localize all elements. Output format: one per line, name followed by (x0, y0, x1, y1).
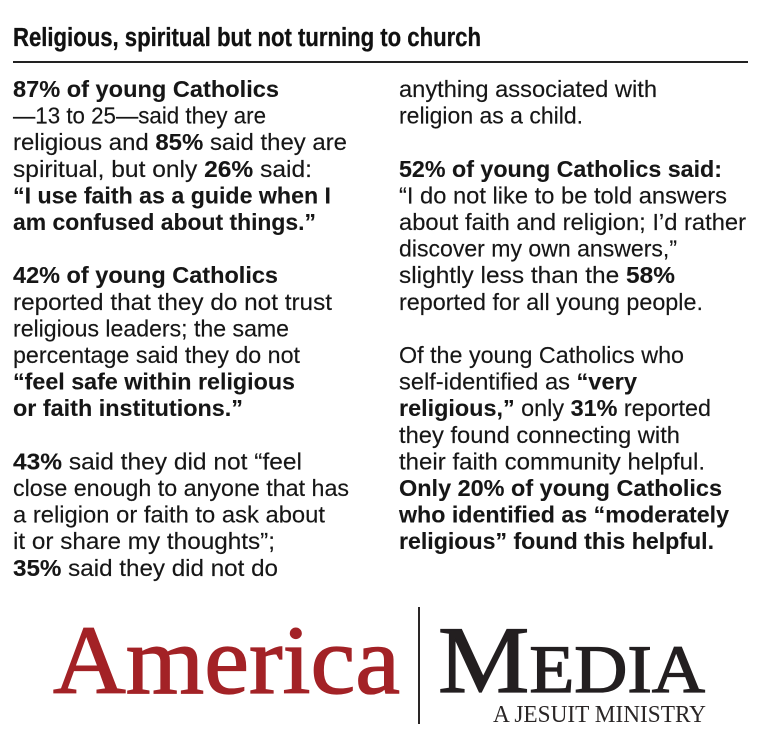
paragraph: 87% of young Catholics: religious and 85% said they are (13, 129, 347, 155)
paragraph: 43% and 35%: 35% said they did not do (13, 555, 278, 581)
logo tagline: A JESUIT MINISTRY (493, 702, 706, 728)
paragraph: 87% of young Catholics: “I use faith as a guide when I (13, 182, 331, 208)
paragraph: continued from left column: religion as a child. (399, 103, 583, 129)
paragraph: very and moderately religious: they found connecting with (399, 422, 680, 448)
paragraph: very and moderately religious: self-identified as “very (399, 369, 637, 395)
paragraph: 43% and 35%: 43% said they did not “feel (13, 448, 302, 474)
paragraph: very and moderately religious: Of the young Catholics who (399, 342, 684, 368)
right text column (398, 76, 746, 554)
paragraph: 43% and 35% (13, 448, 349, 581)
paragraph: 52% of young Catholics said: discover my own answers,” (399, 236, 677, 262)
paragraph: very and moderately religious: religious” found this helpful. (399, 528, 714, 554)
paragraph: 52% of young Catholics said (399, 156, 746, 315)
paragraph: 43% and 35%: close enough to anyone that has (13, 475, 349, 501)
logo: America Media (53, 607, 706, 728)
paragraph: 42% of young Catholics: “feel safe within religious (13, 369, 295, 395)
paragraph: 52% of young Catholics said: 52% of young Catholics said: (399, 156, 722, 182)
logo divider (418, 607, 420, 724)
title: Religious, spiritual but not turning to church (13, 24, 481, 52)
paragraph: 87% of young Catholics: am confused about things.” (13, 209, 316, 235)
logo wordmark: America: America (53, 607, 400, 714)
paragraph: 52% of young Catholics said: reported for all young people. (399, 289, 703, 315)
paragraph: 42% of young Catholics: 42% of young Catholics (13, 262, 278, 288)
logo wordmark: Media: MEDIA (438, 607, 705, 713)
paragraph: very and moderately religious (398, 342, 729, 554)
title rule (13, 61, 748, 63)
paragraph: 52% of young Catholics said: “I do not like to be told answers (399, 182, 727, 208)
paragraph: 87% of young Catholics (13, 76, 347, 235)
paragraph: 43% and 35%: a religion or faith to ask about (13, 502, 325, 528)
paragraph: 42% of young Catholics: percentage said they do not (13, 342, 300, 368)
paragraph: 52% of young Catholics said: about faith and religion; I’d rather (399, 209, 746, 235)
paragraph: 42% of young Catholics: or faith institutions.” (13, 395, 243, 421)
paragraph: 43% and 35%: it or share my thoughts”; (13, 528, 275, 554)
paragraph: very and moderately religious: religious,” only 31% reported (399, 395, 711, 421)
paragraph: very and moderately religious: Only 20% of young Catholics (399, 475, 722, 501)
paragraph: 87% of young Catholics: spiritual, but only 26% said: (13, 156, 312, 182)
paragraph: 87% of young Catholics: —13 to 25—said they are (13, 103, 266, 129)
paragraph: 52% of young Catholics said: slightly less than the 58% (399, 262, 675, 288)
paragraph: 42% of young Catholics: reported that they do not trust (13, 289, 332, 315)
paragraph: 87% of young Catholics: 87% of young Catholics (13, 76, 279, 102)
paragraph: very and moderately religious: their faith community helpful. (399, 448, 705, 474)
paragraph: continued from left column (399, 76, 657, 129)
left text column (13, 76, 349, 581)
paragraph: 42% of young Catholics: religious leaders; the same (13, 315, 289, 341)
paragraph: very and moderately religious: who identified as “moderately (398, 502, 729, 528)
paragraph: 42% of young Catholics (13, 262, 332, 421)
paragraph: continued from left column: anything associated with (399, 76, 657, 102)
